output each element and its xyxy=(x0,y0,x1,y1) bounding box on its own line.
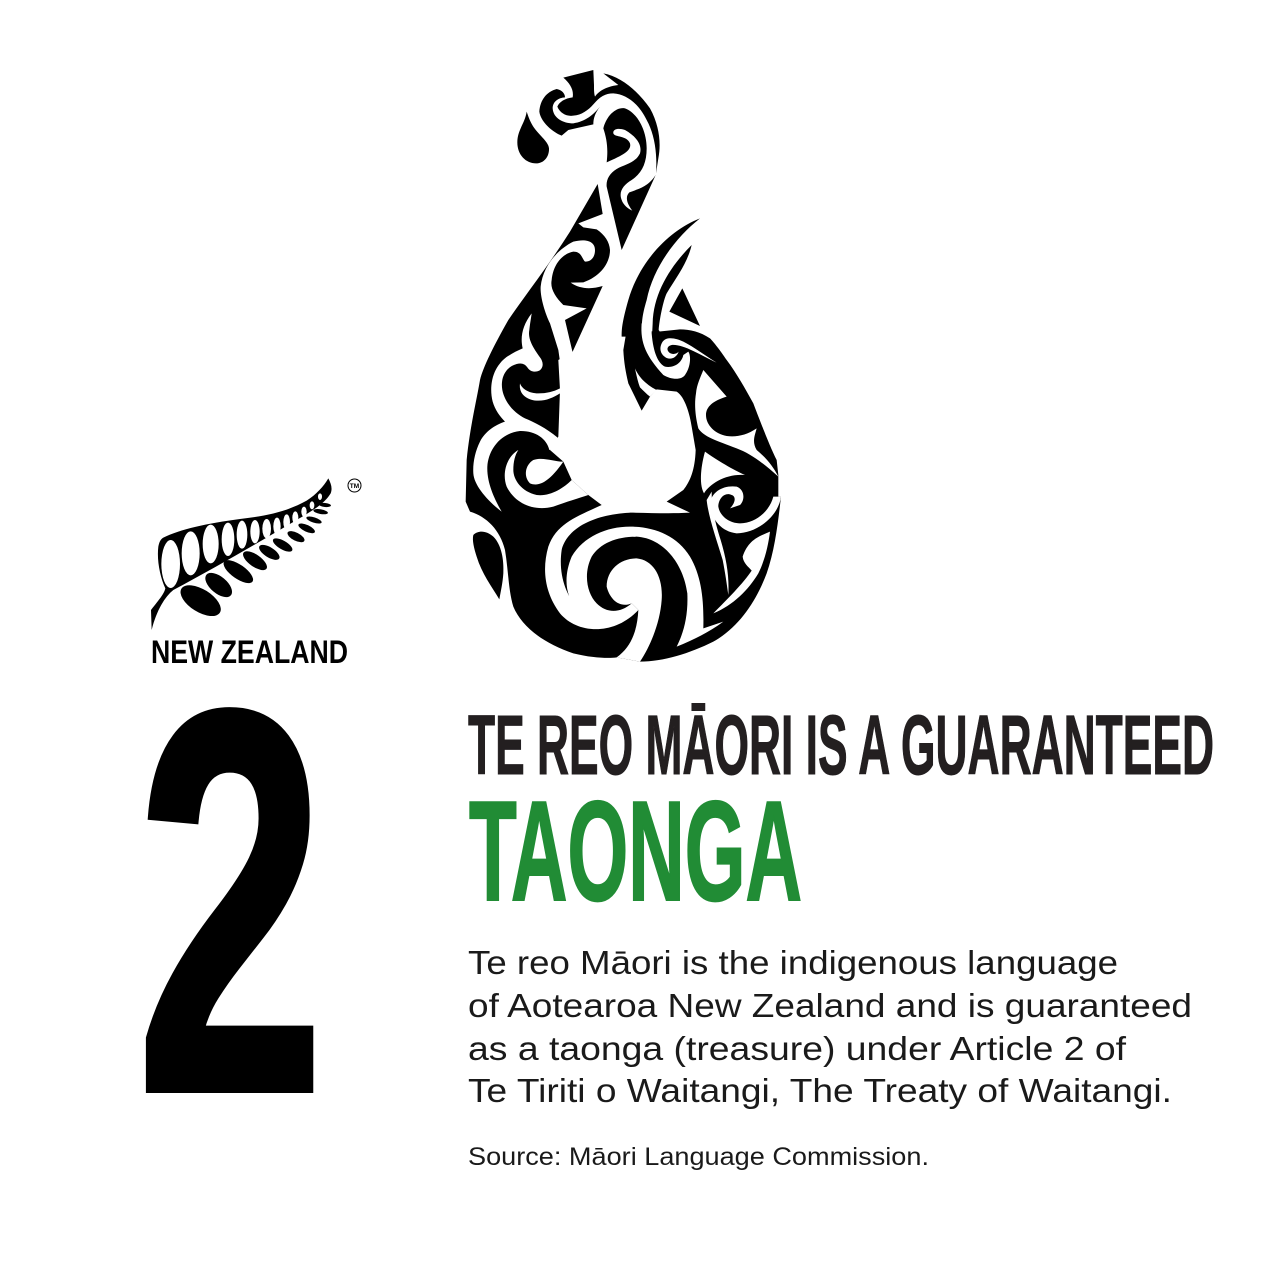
icon: trademark symbol: TM xyxy=(350,483,359,490)
heading keyword: TAONGA xyxy=(469,772,802,931)
icon: hei matau bone-hook carving xyxy=(466,70,781,662)
icon: silver fern logo xyxy=(151,478,332,630)
body text xyxy=(468,944,1192,1109)
right wedge xyxy=(695,370,778,477)
swirl white bands xyxy=(545,505,723,647)
stripe beside swirl xyxy=(541,240,595,373)
body text: Te Tiriti o Waitangi, The Treaty of Waitangi. xyxy=(468,1072,1172,1109)
body text: Te reo Māori is the indigenous language xyxy=(468,944,1118,981)
icon: trademark symbol xyxy=(348,479,361,492)
body silhouette xyxy=(466,184,781,662)
source note: Source: Māori Language Commission. xyxy=(468,1143,929,1171)
ring between strips xyxy=(641,323,690,379)
large fact number: 2 xyxy=(136,599,325,1206)
logo wordmark: NEW ZEALAND xyxy=(151,634,348,670)
body text: of Aotearoa New Zealand and is guaranteed xyxy=(468,987,1192,1024)
left S band xyxy=(473,313,560,512)
body text: as a taonga (treasure) under Article 2 of xyxy=(468,1030,1127,1067)
left drop xyxy=(473,532,503,599)
